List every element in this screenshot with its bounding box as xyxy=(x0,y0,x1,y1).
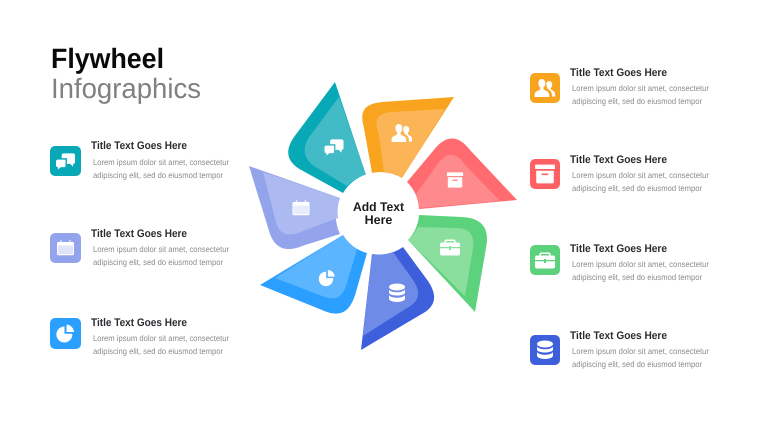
left item 1 xyxy=(50,140,229,180)
flywheel diagram xyxy=(249,82,517,350)
petal: sky blue xyxy=(260,235,367,314)
text: left item 1 xyxy=(91,140,229,180)
text: left item 1: adipiscing elit, sed do eiusmod tempor xyxy=(93,170,223,180)
text: left item 3: Title Text Goes Here xyxy=(91,317,187,329)
icon: calendar xyxy=(50,233,81,263)
text: left item 1: Title Text Goes Here xyxy=(91,140,187,152)
text: right item 3: adipiscing elit, sed do eiusmod tempor xyxy=(572,272,702,282)
text: right item 2 xyxy=(570,154,709,193)
center hub xyxy=(338,172,418,252)
text: right item 4: adipiscing elit, sed do eiusmod tempor xyxy=(572,359,702,369)
left item 2 xyxy=(50,228,229,267)
icon: database xyxy=(530,335,560,365)
icon: people xyxy=(530,73,560,103)
text: right item 1 xyxy=(570,67,709,106)
text: right item 3 xyxy=(570,243,709,282)
text: right item 2: Title Text Goes Here xyxy=(570,154,667,166)
text: left item 1: Lorem ipsum dolor sit amet, consectetur xyxy=(93,157,229,167)
right item 4 xyxy=(530,330,709,369)
icon: briefcase xyxy=(530,245,560,275)
text: right item 1: adipiscing elit, sed do eiusmod tempor xyxy=(572,96,702,106)
petal: periwinkle xyxy=(249,166,340,249)
text: right item 3: Lorem ipsum dolor sit amet, consectetur xyxy=(572,259,709,269)
petal: blue xyxy=(361,247,434,350)
left item 3 xyxy=(50,317,229,356)
title xyxy=(51,43,201,104)
text: right item 3: Title Text Goes Here xyxy=(570,243,667,255)
text: right item 2: Lorem ipsum dolor sit amet, consectetur xyxy=(572,170,709,180)
text: right item 4: Lorem ipsum dolor sit amet, consectetur xyxy=(572,346,709,356)
text: right item 4 xyxy=(570,330,709,369)
title: Flywheel xyxy=(51,43,164,74)
text: right item 4: Title Text Goes Here xyxy=(570,330,667,342)
text: right item 1: Lorem ipsum dolor sit amet, consectetur xyxy=(572,83,709,93)
icon: chat xyxy=(50,146,81,176)
icon: archive box xyxy=(530,159,560,189)
petal: red xyxy=(407,138,517,209)
petal: teal xyxy=(288,82,366,193)
title: Infographics xyxy=(51,73,201,104)
text: right item 2: adipiscing elit, sed do eiusmod tempor xyxy=(572,183,702,193)
center hub: Here xyxy=(365,213,392,227)
text: left item 3: adipiscing elit, sed do eiusmod tempor xyxy=(93,346,223,356)
text: left item 3: Lorem ipsum dolor sit amet, consectetur xyxy=(93,333,229,343)
text: left item 2: Lorem ipsum dolor sit amet, consectetur xyxy=(93,244,229,254)
text: left item 2 xyxy=(91,228,229,267)
right item 3 xyxy=(530,243,709,282)
petal: green xyxy=(408,215,487,312)
text: left item 2: Title Text Goes Here xyxy=(91,228,187,240)
text: left item 3 xyxy=(91,317,229,356)
right item 1 xyxy=(530,67,709,106)
right item 2 xyxy=(530,154,709,193)
petal: orange xyxy=(362,97,454,178)
text: right item 1: Title Text Goes Here xyxy=(570,67,667,79)
text: left item 2: adipiscing elit, sed do eiusmod tempor xyxy=(93,257,223,267)
center hub: Add Text xyxy=(353,200,405,214)
icon: pie chart xyxy=(50,318,81,349)
